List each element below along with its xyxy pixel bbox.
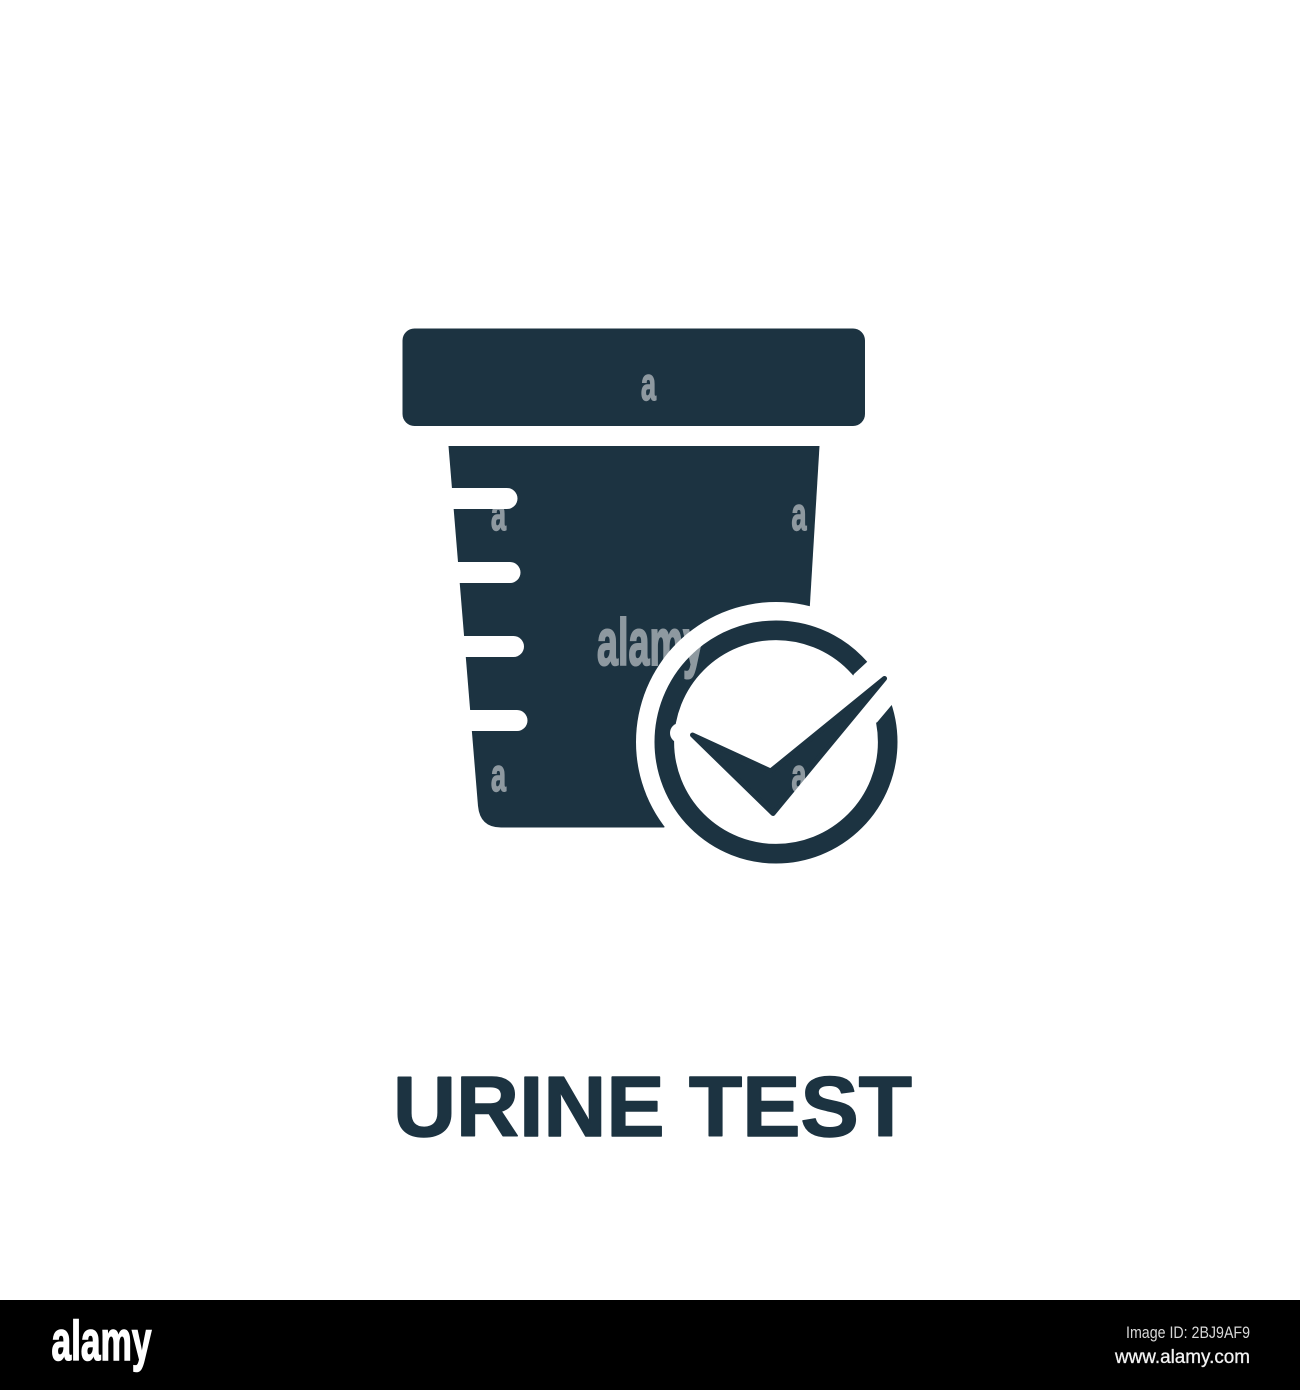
- watermark: alamy letters over icon: a: [641, 358, 656, 410]
- watermark: alamy letters over icon: a: [491, 749, 506, 801]
- watermark: alamy letters over icon: a: [792, 749, 807, 801]
- website url: www.alamy.com: [1114, 1347, 1250, 1368]
- title: URINE TEST: [393, 1060, 912, 1155]
- footer bar: [0, 1300, 1300, 1390]
- icon: container lid: [402, 328, 865, 426]
- icon: check badge: [664, 630, 915, 854]
- watermark: alamy letters over icon: [491, 358, 807, 801]
- watermark: alamy letters over icon: a: [491, 488, 506, 540]
- icon: measuring cup body: [448, 446, 820, 828]
- icon: measurement ticks: [440, 488, 528, 731]
- icon: check mark: [692, 678, 884, 814]
- icon: white halo behind badge: [636, 602, 916, 882]
- icon: badge ring: [664, 630, 888, 854]
- watermark: alamy letters over icon: a: [792, 488, 807, 540]
- image id: Image ID: 2BJ9AF9: [1126, 1323, 1250, 1342]
- footer logo: alamy: [52, 1309, 152, 1372]
- watermark: alamy letters over icon: alamy: [597, 605, 704, 679]
- icon: urine test cup with check badge: [402, 328, 916, 882]
